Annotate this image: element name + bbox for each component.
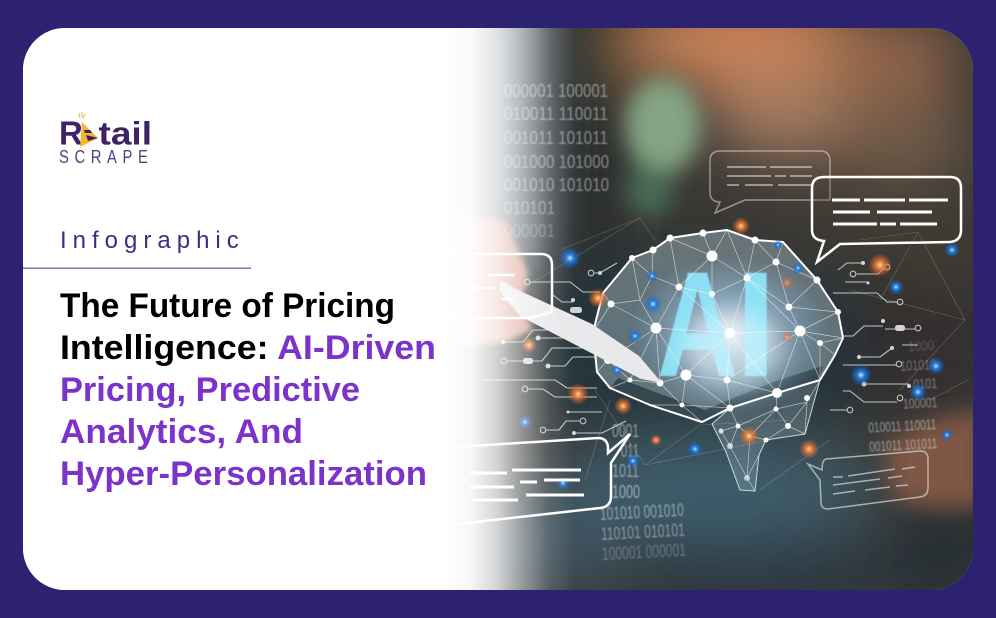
binary digits: 010011 110011 <box>504 104 608 124</box>
binary digits: 0101 <box>913 375 938 393</box>
title: Hyper-Personalization <box>60 455 427 493</box>
logo: tail letters: tail <box>98 116 152 152</box>
stylus pen <box>500 280 662 383</box>
binary digits: 110101 010101 <box>600 520 685 544</box>
glowing particles <box>518 217 960 490</box>
AI letters: A <box>657 240 738 408</box>
logo: SCRAPE: SCRAPE <box>59 146 153 167</box>
speech bubble: front top <box>812 177 961 262</box>
binary digits: 101010 001010 <box>599 500 684 524</box>
white fade over photo <box>23 20 575 600</box>
brain nodes <box>590 230 841 481</box>
AI letters <box>660 272 768 377</box>
binary digits: 011 <box>621 441 639 461</box>
binary digits: 001000 101000 <box>504 152 609 172</box>
logo: Retail wordmark: R <box>59 114 83 152</box>
mesh <box>593 230 843 491</box>
logo: cone mark <box>80 122 98 147</box>
background network lines <box>520 218 968 490</box>
AI letters: I <box>735 240 777 408</box>
binary digits: 000001 100001 <box>504 81 608 101</box>
binary digits: 000001 <box>504 221 555 241</box>
title: Intelligence: AI-Driven <box>60 329 436 367</box>
glowing brain <box>590 230 843 491</box>
binary digits: 0001 <box>612 421 639 441</box>
brain stem <box>712 380 820 491</box>
center light over the letters <box>682 312 782 388</box>
binary digits: 010101 <box>504 198 555 218</box>
brain outline <box>593 230 843 422</box>
logo: cone dark side <box>84 130 98 141</box>
binary digits: 010011 110011 <box>868 416 937 437</box>
brain fill <box>593 230 843 422</box>
speech bubble: bottom right <box>808 451 928 509</box>
binary digits: 101010 <box>900 356 937 375</box>
brain lower rim shadow <box>610 366 822 422</box>
title: Analytics, And <box>60 413 303 451</box>
binary digits: 1011 <box>612 461 639 481</box>
divider line <box>23 268 251 269</box>
binary digits: 1000 <box>612 482 640 502</box>
binary digits: 100001 <box>903 394 938 413</box>
binary digits: 001011 101011 <box>504 128 608 148</box>
hand <box>472 217 535 346</box>
logo <box>59 112 153 167</box>
binary digits <box>504 81 941 564</box>
logo: yellow sparkles <box>79 112 85 118</box>
binary digits: 001011 101011 <box>869 435 938 456</box>
title <box>60 287 436 493</box>
glow behind the AI letters <box>638 260 823 410</box>
speech bubble: bottom left <box>471 433 631 524</box>
speech bubble: back top <box>710 151 830 213</box>
circuit traces <box>483 261 921 435</box>
binary digits: 001010 101010 <box>504 175 609 195</box>
title: The Future of Pricing <box>60 287 395 325</box>
binary digits: 1000 <box>908 337 935 355</box>
photo background <box>471 28 973 590</box>
binary digits: 100001 000001 <box>601 540 686 564</box>
title: Pricing, Predictive <box>60 371 360 409</box>
label: Infographic: Infographic <box>60 227 245 254</box>
speech bubble: left top <box>476 252 554 320</box>
